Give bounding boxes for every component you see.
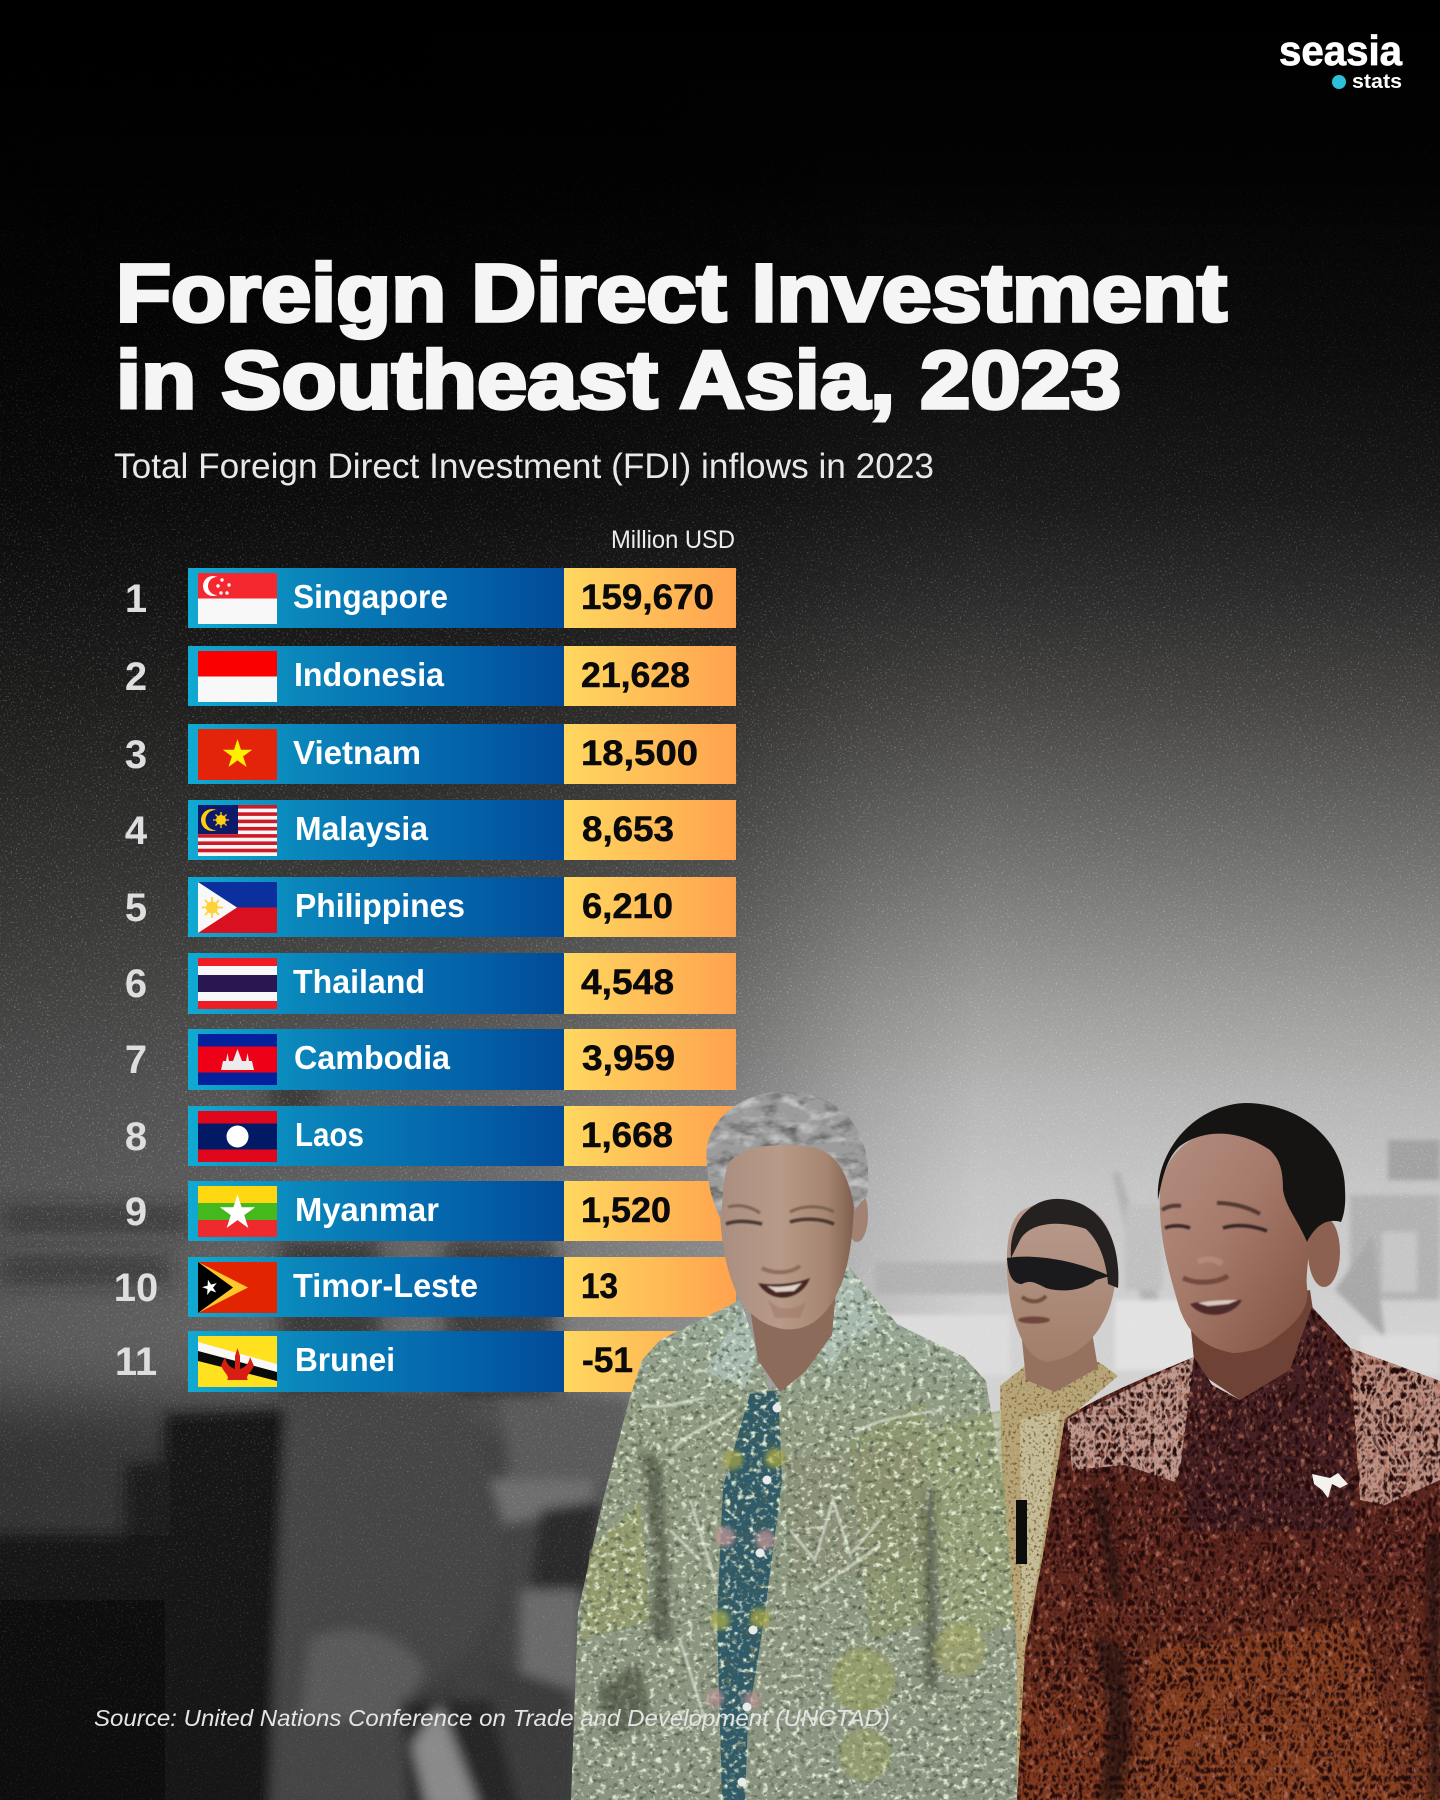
guard facial features xyxy=(1018,1296,1050,1324)
flag: Singapore xyxy=(198,573,277,624)
neck and chest xyxy=(748,1270,838,1392)
flag: Vietnam xyxy=(198,729,277,780)
row 9: Myanmar: 1,520 xyxy=(581,1191,671,1230)
row 1: Singapore xyxy=(125,568,736,628)
flag: Myanmar xyxy=(198,1186,277,1237)
row 3: Vietnam: 18,500 xyxy=(581,734,698,773)
row 10: Timor-Leste: 10 xyxy=(114,1266,158,1310)
flag: Philippines xyxy=(198,882,277,933)
shirt: dark sleeve folds xyxy=(596,1450,938,1740)
guard neck xyxy=(1022,1320,1098,1392)
row 2: Indonesia: 2 xyxy=(125,655,147,699)
row 11: Brunei: 11 xyxy=(115,1340,157,1384)
neck xyxy=(1190,1290,1322,1400)
logo: seasia stats: stats xyxy=(1352,71,1402,93)
row 8: Laos: 1,668 xyxy=(581,1116,673,1155)
row 2: Indonesia: 21,628 xyxy=(581,656,690,695)
guard gold shirt xyxy=(1000,1362,1118,1800)
flag: Malaysia xyxy=(198,805,277,856)
row 11: Brunei: Brunei xyxy=(295,1341,395,1378)
subtitle: Total Foreign Direct Investment (FDI) inflows in 2023 xyxy=(114,447,934,486)
row 8: Laos: Laos xyxy=(295,1116,364,1153)
row 7: Cambodia xyxy=(125,1029,736,1090)
row 10: Timor-Leste xyxy=(114,1257,736,1317)
row 4: Malaysia xyxy=(125,800,736,860)
row 6: Thailand xyxy=(125,953,736,1014)
row 7: Cambodia: 3,959 xyxy=(582,1039,675,1078)
row 7: Cambodia: 7 xyxy=(125,1038,147,1082)
facial features xyxy=(726,1206,834,1318)
row 3: Vietnam: Vietnam xyxy=(293,734,421,771)
unit label: Million USD xyxy=(611,526,735,554)
ranking table xyxy=(114,568,736,1392)
face xyxy=(720,1140,854,1329)
flag: Laos xyxy=(198,1111,277,1162)
row 5: Philippines: 5 xyxy=(125,886,147,930)
row 6: Thailand: Thailand xyxy=(293,963,425,1000)
flag: Timor-Leste xyxy=(198,1262,277,1313)
shirt buttons xyxy=(738,1404,782,1786)
flag: Indonesia xyxy=(198,651,277,702)
row 2: Indonesia xyxy=(125,646,736,706)
row 9: Myanmar xyxy=(125,1181,736,1241)
shirt: dark folds xyxy=(1090,1490,1440,1800)
row 10: Timor-Leste: Timor-Leste xyxy=(293,1267,478,1304)
face xyxy=(1160,1128,1309,1353)
hair xyxy=(706,1092,868,1218)
lanyard badge xyxy=(1016,1500,1027,1564)
row 6: Thailand: 4,548 xyxy=(581,963,674,1002)
background: shadow at lower left xyxy=(0,1400,630,1800)
row 1: Singapore: Singapore xyxy=(293,578,448,615)
brown batik shirt xyxy=(1017,1307,1440,1800)
flag: Thailand xyxy=(198,958,277,1009)
row 1: Singapore: 1 xyxy=(125,577,147,621)
row 10: Timor-Leste: 13 xyxy=(581,1267,618,1306)
row 5: Philippines: Philippines xyxy=(295,887,465,924)
row 11: Brunei: -51 xyxy=(582,1341,633,1380)
background: blurred figure and furniture xyxy=(0,1392,630,1800)
green batik shirt xyxy=(571,1263,1017,1800)
facial features xyxy=(1162,1203,1267,1315)
background: dark silhouettes behind the table xyxy=(0,1060,555,1400)
guard hair xyxy=(1011,1199,1118,1288)
row 6: Thailand: 6 xyxy=(125,962,147,1006)
row 4: Malaysia: Malaysia xyxy=(295,810,429,847)
person: guard in sunglasses xyxy=(1000,1199,1118,1800)
hair xyxy=(1158,1103,1345,1242)
ear xyxy=(1308,1217,1340,1287)
row 4: Malaysia: 4 xyxy=(125,809,148,853)
row 9: Myanmar: 9 xyxy=(125,1190,147,1234)
title: in Southeast Asia, 2023 xyxy=(116,335,1121,426)
flag: Brunei xyxy=(198,1336,277,1387)
row 7: Cambodia: Cambodia xyxy=(294,1039,451,1076)
row 5: Philippines: 6,210 xyxy=(582,887,673,926)
row 5: Philippines xyxy=(125,877,736,937)
row 11: Brunei xyxy=(115,1331,736,1392)
row 4: Malaysia: 8,653 xyxy=(582,810,674,849)
logo: seasia stats xyxy=(1279,27,1403,93)
row 8: Laos xyxy=(125,1106,736,1166)
row 8: Laos: 8 xyxy=(125,1115,147,1159)
row 9: Myanmar: Myanmar xyxy=(295,1191,439,1228)
title: Foreign Direct Investment xyxy=(116,248,1227,339)
logo: seasia stats: seasia xyxy=(1279,27,1403,74)
sunglasses xyxy=(1007,1257,1110,1290)
row 3: Vietnam xyxy=(125,724,736,784)
background: distant buildings xyxy=(860,1140,1440,1375)
person: man in brown batik shirt xyxy=(1017,1103,1440,1800)
flag: Cambodia xyxy=(198,1034,277,1085)
ear xyxy=(846,1188,868,1242)
shirt: flower motifs xyxy=(706,1448,986,1781)
row 3: Vietnam: 3 xyxy=(125,733,147,777)
row 1: Singapore: 159,670 xyxy=(581,578,714,617)
guard face xyxy=(1007,1202,1116,1362)
person: man in green batik shirt xyxy=(571,1092,1017,1800)
lapel pin xyxy=(1312,1473,1348,1498)
source note: Source: United Nations Conference on Trade and Development (UNCTAD) xyxy=(94,1705,890,1731)
row 2: Indonesia: Indonesia xyxy=(294,656,445,693)
shirt: pale fabric highlights xyxy=(640,1398,942,1720)
title xyxy=(116,248,1227,426)
